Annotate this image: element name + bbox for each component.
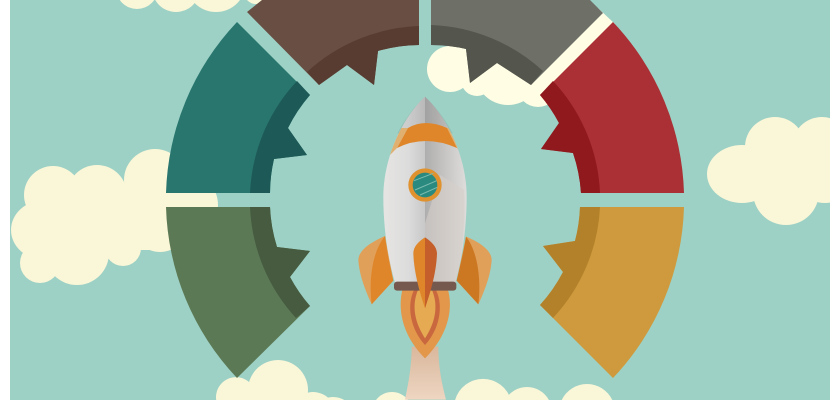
rocket xyxy=(358,97,492,400)
segment: teal xyxy=(166,22,310,193)
nose band xyxy=(390,123,458,155)
exhaust trail xyxy=(405,347,446,400)
left fin xyxy=(358,236,393,304)
cloud: behind gray segment xyxy=(427,8,615,107)
body shadow xyxy=(425,175,464,283)
segment: green xyxy=(166,207,310,378)
segment: gold xyxy=(540,207,684,378)
right fin xyxy=(457,237,492,304)
center fin xyxy=(413,237,437,308)
nose shade xyxy=(397,97,453,133)
segment: brown xyxy=(247,0,419,85)
segment: red xyxy=(540,22,684,193)
cloud: left xyxy=(11,149,218,285)
porthole window xyxy=(408,168,442,202)
base ring xyxy=(394,282,456,291)
clouds: bottom xyxy=(216,360,612,400)
flame xyxy=(401,290,450,358)
body right half xyxy=(425,97,467,283)
cloud: right xyxy=(707,117,840,225)
segment: gray xyxy=(431,0,603,85)
body left half xyxy=(383,97,425,283)
cloud: top left xyxy=(116,0,268,12)
